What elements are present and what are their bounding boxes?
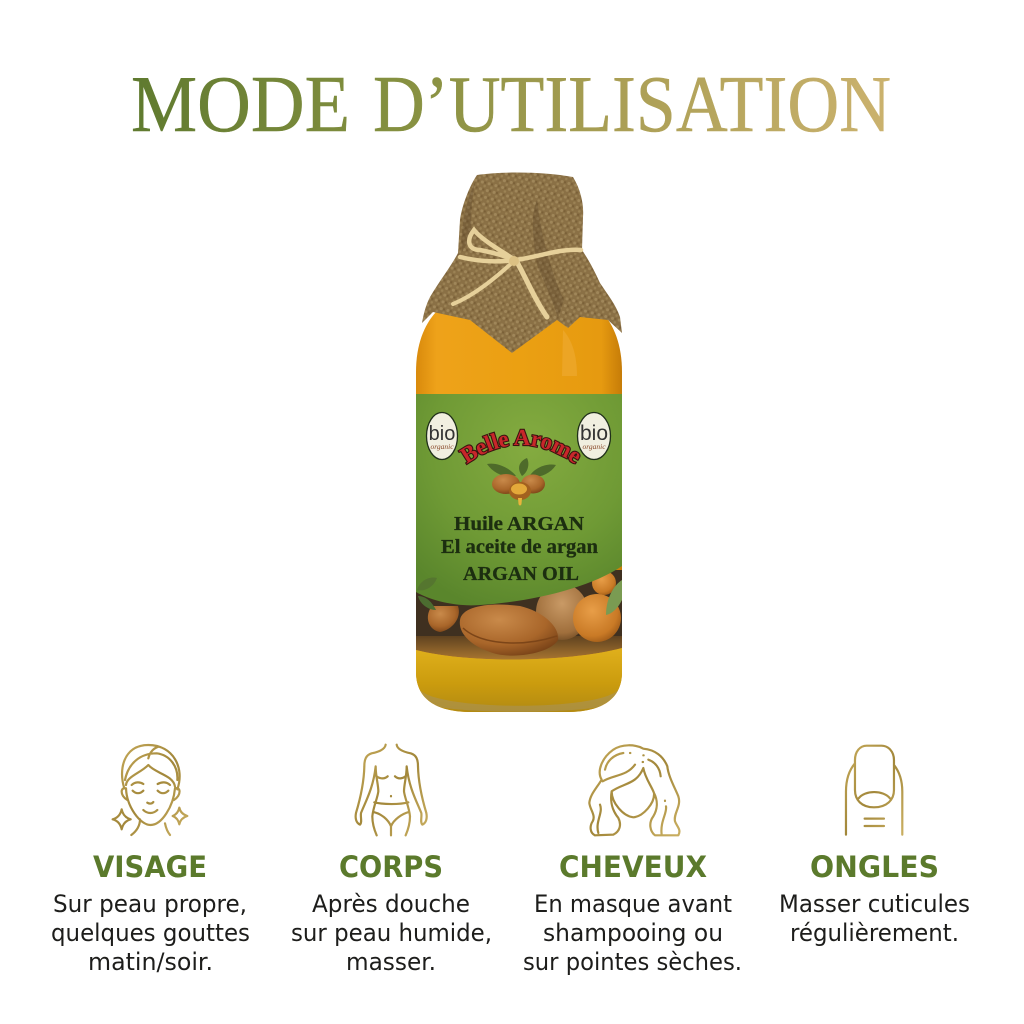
icon: body <box>356 745 427 835</box>
badge word: bio <box>429 423 455 445</box>
raffia band <box>460 250 581 261</box>
title word 2: D’UTILISATION <box>373 61 891 149</box>
line 2: régulièrement. <box>790 919 959 947</box>
label photo background <box>416 570 622 642</box>
leaf left lower <box>418 596 436 610</box>
product name Spanish: El aceite de argan <box>441 536 598 558</box>
oil highlight <box>562 330 577 376</box>
nut right <box>521 474 545 494</box>
heading: ONGLES <box>810 850 939 884</box>
badge circle <box>426 412 458 460</box>
icon: face <box>113 745 187 835</box>
column: corps <box>291 745 492 976</box>
line 2: sur peau humide, <box>291 919 492 947</box>
title word 1: MODE <box>131 61 350 149</box>
argan nut right <box>573 594 621 642</box>
leaves <box>487 458 556 477</box>
line 2: shampooing ou <box>543 919 723 947</box>
badge subtext: organic <box>582 442 606 451</box>
icon: hair <box>589 745 679 835</box>
line 2: quelques gouttes <box>51 919 250 947</box>
badge word: bio <box>580 422 608 445</box>
bio badge left <box>426 412 458 460</box>
column: ongles <box>779 746 970 947</box>
oil at the bottom of the bottle <box>416 648 622 712</box>
description <box>51 890 250 976</box>
raffia left end <box>453 262 513 304</box>
argan nut back <box>536 588 584 640</box>
badge circle <box>578 412 610 460</box>
description <box>779 890 970 947</box>
description <box>291 890 492 976</box>
bottle body with oil <box>416 312 622 712</box>
heading: CHEVEUX <box>559 850 707 884</box>
brand name: Belle Arome <box>457 428 580 466</box>
line 3: sur pointes sèches. <box>523 948 742 976</box>
bio badge right <box>578 412 610 460</box>
leaf right <box>606 580 622 615</box>
column: cheveux <box>523 745 742 976</box>
nut centre <box>509 482 531 500</box>
raffia knot <box>509 256 519 266</box>
green label area <box>416 394 622 605</box>
bottle base glass rim <box>420 690 618 712</box>
heading: CORPS <box>339 850 443 884</box>
column: visage <box>51 745 250 976</box>
line 1: Sur peau propre, <box>53 890 247 918</box>
oil drop <box>518 498 522 506</box>
title <box>131 61 891 149</box>
raffia tie <box>453 230 581 317</box>
large argan nut <box>460 605 558 656</box>
line 1: Masser cuticules <box>779 890 970 918</box>
nut ridge <box>463 628 557 643</box>
burlap cover <box>422 173 622 353</box>
line 1: En masque avant <box>534 890 732 918</box>
wooden table <box>416 636 622 660</box>
burlap fold shadow <box>462 180 564 318</box>
raffia right end <box>517 262 547 317</box>
line 3: masser. <box>346 948 436 976</box>
icon: nail <box>846 746 902 835</box>
raffia loop <box>469 230 515 260</box>
argan nut top right <box>592 571 616 595</box>
label <box>416 394 622 712</box>
product name French: Huile ARGAN <box>454 513 585 535</box>
nut left <box>492 474 520 494</box>
product name English: ARGAN OIL <box>463 563 579 585</box>
leaf left upper <box>417 578 437 590</box>
bottle <box>416 172 622 712</box>
line 1: Après douche <box>312 890 470 918</box>
argan nut left <box>428 606 459 632</box>
label logo: argan nuts and leaves <box>487 458 556 506</box>
line 3: matin/soir. <box>88 948 213 976</box>
description <box>523 890 742 976</box>
badge subtext: organic <box>430 442 454 451</box>
glossy kernel <box>511 484 527 494</box>
heading: VISAGE <box>93 850 207 884</box>
